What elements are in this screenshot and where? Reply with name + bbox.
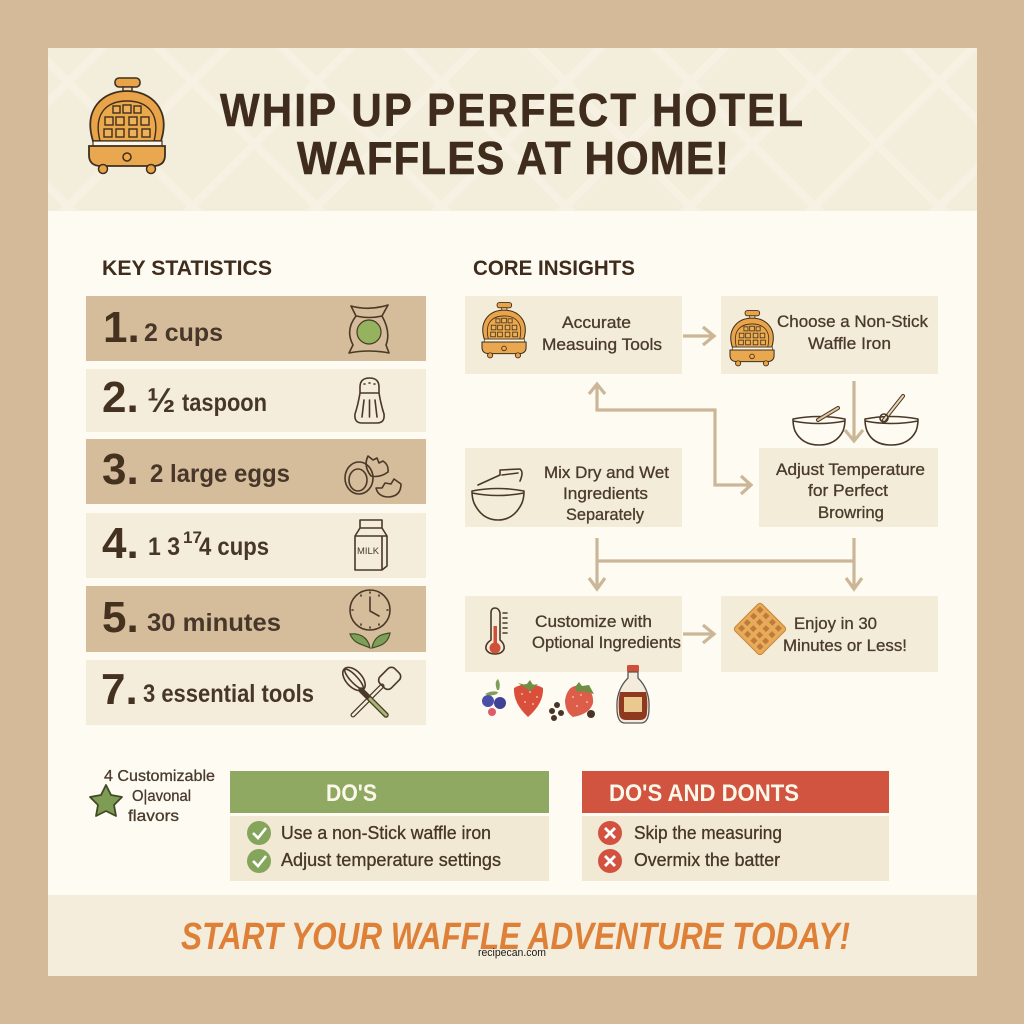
step: choose a non-stick waffle iron: Waffle Iron <box>808 334 891 353</box>
stat 4: 1 3/4 cups: 4 cups <box>199 533 269 561</box>
step: enjoy in 30 minutes: Enjoy in 30 <box>794 614 877 633</box>
callout: customizable flavors: O|avonal <box>132 788 191 805</box>
watermark: recipecan.com <box>478 947 546 959</box>
step: customize with optional ingredients: Optional Ingredients <box>532 633 681 652</box>
step: adjust temperature: Browring <box>818 503 884 522</box>
icon: mixing bowls <box>793 396 918 445</box>
step: customize with optional ingredients: Customize with <box>535 612 652 631</box>
panel: don'ts <box>582 771 889 881</box>
arrow: branch down to bottom row <box>589 538 862 589</box>
panel: do's: DO'S <box>326 780 377 807</box>
stat 5: 30 minutes <box>86 586 426 652</box>
stat 5: 30 minutes: 5. <box>102 593 139 642</box>
header band <box>48 48 977 211</box>
arrow: measuring to iron <box>683 327 714 345</box>
callout: customizable flavors <box>90 768 215 825</box>
panel: don'ts: DO'S AND DONTS <box>609 780 799 807</box>
step: enjoy in 30 minutes: Minutes or Less! <box>783 636 907 655</box>
stat 4: 1 3/4 cups: 1 3 <box>148 533 180 561</box>
footer band <box>48 895 977 976</box>
stat 1: 2 cups: 2 cups <box>144 319 223 347</box>
stat 2: half teaspoon: taspoon <box>182 389 267 417</box>
icon: berries, chocolate and syrup <box>482 665 649 723</box>
title: WAFFLES AT HOME! <box>297 133 729 184</box>
step: mix dry and wet: Separately <box>566 505 644 524</box>
step: choose a non-stick waffle iron <box>721 296 938 374</box>
panel: don'ts: Overmix the batter <box>634 850 780 870</box>
step: customize with optional ingredients <box>465 596 682 672</box>
stat 2: half teaspoon: 2. <box>102 373 139 422</box>
step: accurate measuring tools: Measuing Tools <box>542 335 662 354</box>
step: adjust temperature: Adjust Temperature <box>776 460 925 479</box>
stat 4: 1 3/4 cups: 17 <box>183 528 202 547</box>
panel: core insights flow <box>465 296 938 723</box>
step: accurate measuring tools: Accurate <box>562 313 631 332</box>
stat 3: 2 large eggs: 3. <box>102 445 139 494</box>
step: choose a non-stick waffle iron: Choose a Non-Stick <box>777 312 928 331</box>
step: mix dry and wet <box>465 448 682 527</box>
step: mix dry and wet: Ingredients <box>563 484 648 503</box>
step: enjoy in 30 minutes <box>721 596 938 672</box>
stat 3: 2 large eggs: 2 large eggs <box>150 460 290 488</box>
step: accurate measuring tools <box>465 296 682 374</box>
title <box>220 85 803 184</box>
arrow: two-way elbow <box>589 384 751 494</box>
title: WHIP UP PERFECT HOTEL <box>220 85 803 136</box>
stat 6: 3 essential tools: 3 essential tools <box>143 680 314 708</box>
callout: customizable flavors: flavors <box>128 808 179 825</box>
heading: key statistics: KEY STATISTICS <box>102 257 272 280</box>
panel: key statistics list <box>86 296 426 725</box>
stat 4: 1 3/4 cups <box>86 513 426 578</box>
step: mix dry and wet: Mix Dry and Wet <box>544 463 669 482</box>
stat 4: 1 3/4 cups: 4. <box>102 519 139 568</box>
arrow: customize to enjoy <box>683 625 714 643</box>
stat 4: 1 3/4 cups: MILK <box>357 546 379 556</box>
call to action: START YOUR WAFFLE ADVENTURE TODAY! <box>181 916 850 958</box>
stat 2: half teaspoon: ½ <box>147 382 175 420</box>
panel: do's <box>230 771 549 881</box>
panel: do's: Use a non-Stick waffle iron <box>281 823 491 843</box>
stat 6: 3 essential tools <box>86 660 426 725</box>
stat 1: 2 cups <box>86 296 426 361</box>
stat 1: 2 cups: 1. <box>103 303 140 352</box>
panel: do's: Adjust temperature settings <box>281 850 501 870</box>
icon: waffle iron <box>89 78 165 174</box>
stat 5: 30 minutes: 30 minutes <box>147 609 281 637</box>
stat 3: 2 large eggs <box>86 439 426 504</box>
stat 6: 3 essential tools: 7. <box>101 665 138 714</box>
panel: don'ts: Skip the measuring <box>634 823 782 843</box>
callout: customizable flavors: 4 Customizable <box>104 768 215 785</box>
arrow: iron down to temperature <box>845 381 863 441</box>
step: adjust temperature <box>759 448 938 527</box>
stat 2: half teaspoon <box>86 369 426 432</box>
step: adjust temperature: for Perfect <box>808 481 888 500</box>
heading: core insights: CORE INSIGHTS <box>473 257 635 280</box>
